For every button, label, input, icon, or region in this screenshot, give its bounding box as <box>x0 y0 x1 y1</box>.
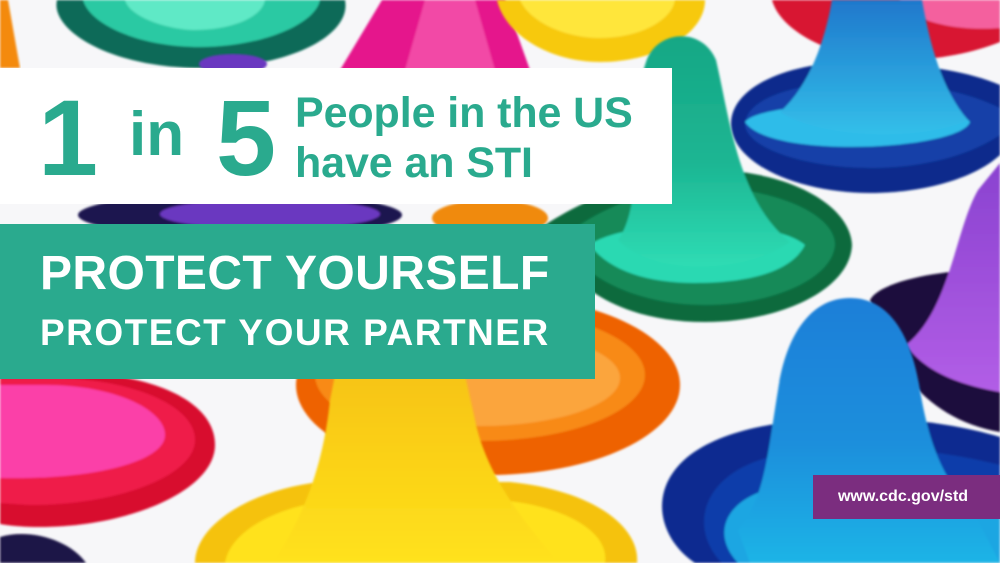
condom: lower right blue <box>662 298 1000 563</box>
condom: upper right blue <box>731 0 1000 193</box>
heading: protect yourself: PROTECT YOURSELF <box>40 247 550 300</box>
number: 5: 5 <box>216 77 276 198</box>
word: in: in <box>129 100 184 169</box>
panel: call to action <box>0 224 595 379</box>
condom: centre green <box>545 36 852 322</box>
condom: purple tip behind headline <box>199 54 267 74</box>
condom: lower left pink/red <box>0 372 215 527</box>
condom: bottom-left dark purple <box>0 534 86 563</box>
headline text: People in the US <box>295 89 633 137</box>
headline text: have an STI <box>295 139 533 187</box>
badge: website link: www.cdc.gov/std <box>838 488 968 505</box>
condom: right purple/black <box>870 163 1000 432</box>
headline text <box>295 89 633 187</box>
condom: top right red <box>772 0 1000 60</box>
number: 1: 1 <box>38 77 98 198</box>
badge: website link <box>813 475 1000 519</box>
panel: headline statistic <box>0 68 672 204</box>
heading: protect your partner: PROTECT YOUR PARTNER <box>40 312 550 353</box>
condom: top centre magenta <box>340 0 530 70</box>
orange sliver top-left <box>0 0 20 68</box>
condom: top-left green <box>56 0 346 68</box>
condom: lower centre yellow <box>195 375 637 563</box>
condom: top centre yellow <box>497 0 705 62</box>
condom: centre orange <box>296 200 680 475</box>
condom: purple behind panels <box>78 193 402 237</box>
